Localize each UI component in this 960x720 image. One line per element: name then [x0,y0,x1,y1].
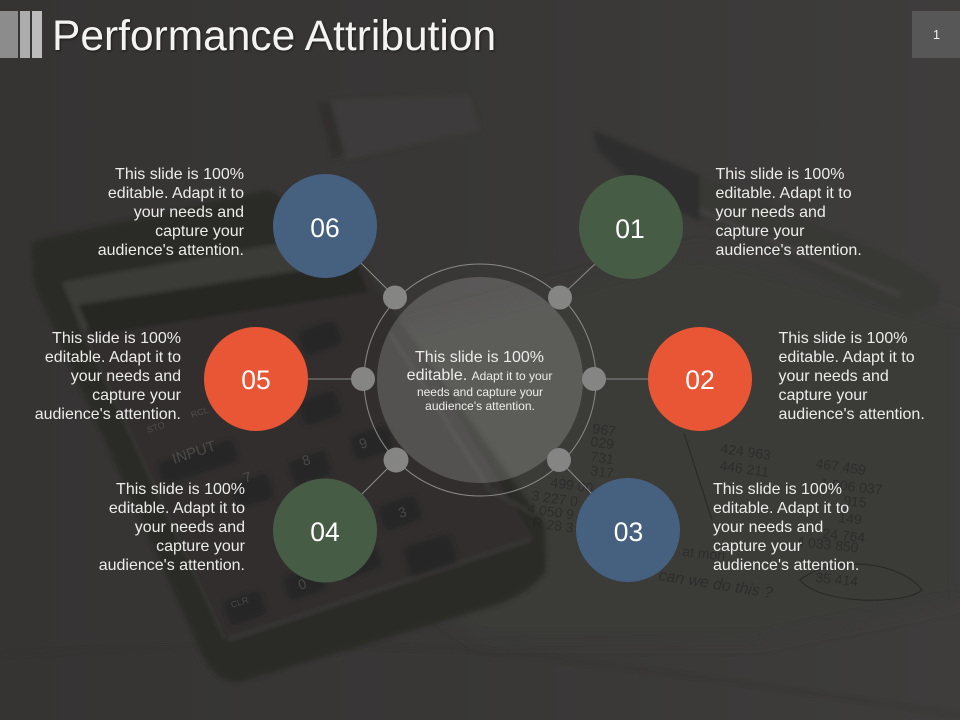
item 06 text: audience's attention. [98,242,244,259]
center text: needs and capture your [417,385,543,399]
item 03 text: your needs and [713,519,823,536]
item 05 text: audience's attention. [35,406,181,423]
item 05 circle [204,327,308,431]
item 06 circle: 06 [310,213,340,243]
item 03 text: This slide is 100% [713,481,842,498]
center text: audience's attention. [425,399,535,413]
item 02 text: audience's attention. [778,406,925,423]
item 02 text: capture your [778,387,868,404]
item 05 text: capture your [92,387,182,404]
item 04 text: editable. Adapt it to [109,500,245,517]
paper figures: 467 459 [815,455,867,478]
background photo: calculator, pen and paper: 8 [300,451,313,469]
item 02 circle: 02 [685,365,715,395]
background photo: calculator, pen and paper: INPUT [170,438,218,468]
item 01 text: This slide is 100% [716,166,844,183]
item 06 text: capture your [155,223,245,240]
item 02 text: This slide is 100% [778,330,907,347]
paper figures: 3 227 0 [531,487,579,510]
paper figures: 35 414 [815,569,859,589]
item 05 text: This slide is 100% [52,330,181,347]
item 04 text: audience's attention. [99,557,245,574]
item 05 text: editable. Adapt it to [45,349,181,366]
item 01 circle [579,175,683,279]
item 04 text: This slide is 100% [116,481,245,498]
item 04 text: your needs and [135,519,245,536]
pen [593,130,940,315]
paper figures: 24 764 [822,525,866,545]
paper figures: 4 033 850 [796,533,860,556]
center text: This slide is 100% [415,349,544,366]
item 03 circle [576,478,680,582]
item 01 text: your needs and [716,204,826,221]
item 03 text: editable. Adapt it to [713,500,849,517]
background photo: calculator, pen and paper: 0 [296,575,309,593]
connector lines [308,261,650,495]
calculator body [32,190,546,682]
paper figures: at mon [682,543,726,563]
item 03 text: audience's attention. [713,557,859,574]
page number: 1 [933,27,940,42]
paper figures: 4 050 9 [527,500,575,523]
item 01 text: capture your [716,223,805,240]
item 05 circle: 05 [241,365,271,395]
item 04 text: capture your [156,538,246,555]
item 01 text: editable. Adapt it to [716,185,852,202]
item 01 circle: 01 [615,214,645,244]
background photo: calculator, pen and paper: 3 [396,503,409,521]
item 05 text: your needs and [71,368,181,385]
title bars [0,11,42,58]
paper figures: 1 006 037 [820,475,884,498]
page number [912,11,960,58]
paper figures [527,420,922,602]
paper figures: R 28 3 [532,514,575,536]
center text: editable. Adapt it to your [407,367,552,384]
paper figures: 149 [838,509,863,527]
paper figures: 029 [590,433,615,452]
item 06 circle [273,174,377,278]
item 03 circle: 03 [614,517,643,547]
item 01 text: audience's attention. [716,242,862,259]
background photo: calculator, pen and paper: STO [146,420,166,435]
item 06 text: editable. Adapt it to [108,185,244,202]
background photo: calculator, pen and paper: 9 [357,434,370,452]
item 06 text: your needs and [134,204,244,221]
item 02 text: your needs and [778,368,889,385]
item 02 circle [648,327,752,431]
paper figures: 317 [590,462,615,481]
paper figures: 731 [590,448,615,467]
item 06 text: This slide is 100% [115,166,244,183]
paper figures: 967 [592,420,617,439]
paper figures: 424 963 [720,440,772,463]
item 03 text: capture your [713,538,803,555]
background photo: calculator, pen and paper: CLR [230,595,250,610]
paper figures: 446 211 [719,457,770,480]
item 04 circle: 04 [310,517,340,547]
paper figures: can we do this ? [657,567,774,602]
background photo: calculator, pen and paper: RCL [190,405,210,420]
item 02 text: editable. Adapt it to [778,349,915,366]
central diagram: ring and disk [364,264,596,496]
item 04 circle [273,478,377,582]
paper figures: 499 00 [550,474,594,496]
connector nodes [351,286,606,472]
paper figures: 915 [843,492,868,510]
background photo: calculator, pen and paper: 7 [241,468,254,486]
title: Performance Attribution [52,13,496,60]
